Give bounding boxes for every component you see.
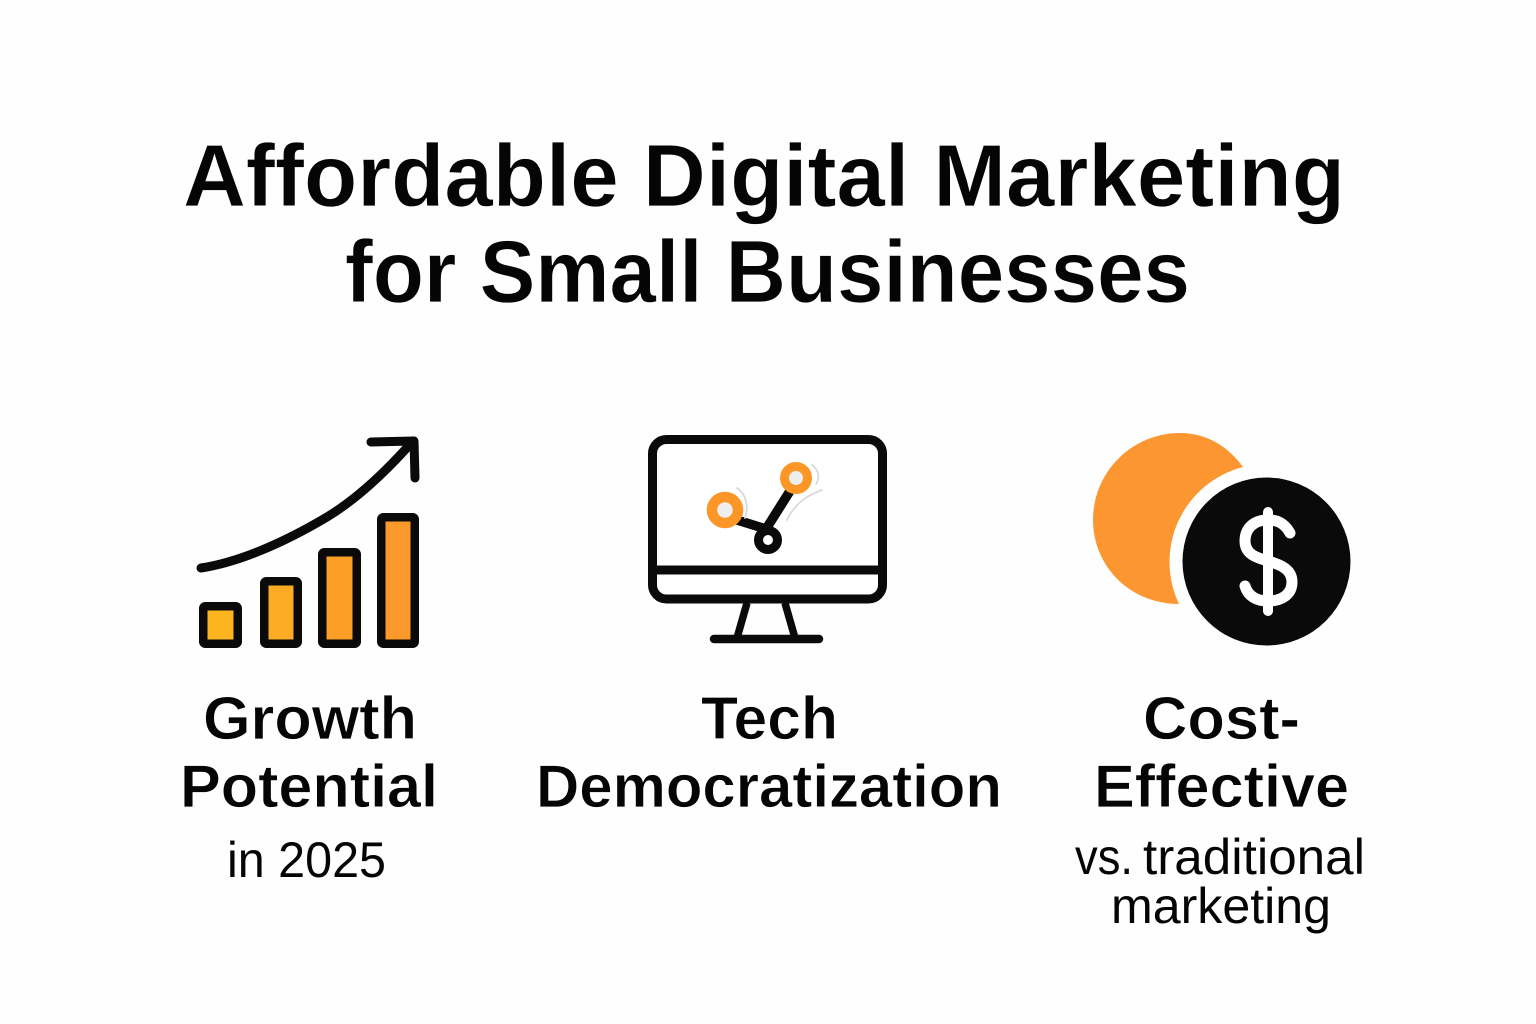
- subtext: vs. traditional marketing: [1075, 829, 1365, 934]
- subtext: vs. traditional marketing: marketing: [1111, 878, 1331, 934]
- heading: cost-effective: Cost-: [1143, 685, 1300, 752]
- heading: growth potential: [180, 685, 438, 820]
- heading: growth potential: Growth: [203, 685, 417, 752]
- heading: tech democratization: Democratization: [536, 753, 1002, 820]
- icon: orange crescent and dollar coin: [1093, 433, 1350, 646]
- heading: tech democratization: Tech: [701, 685, 838, 752]
- subtext: vs. traditional marketing: vs.: [1075, 829, 1133, 885]
- icon: monitor with connected nodes: [650, 440, 885, 639]
- heading: tech democratization: [536, 685, 1002, 820]
- subtext: in 2025: in 2025: [227, 832, 386, 888]
- panel: cost-effective: [1075, 433, 1365, 934]
- heading: cost-effective: [1094, 685, 1349, 820]
- subtext: vs. traditional marketing: traditional: [1143, 829, 1365, 885]
- heading: cost-effective: Effective: [1094, 753, 1349, 820]
- icon: bar chart with rising arrow: [201, 441, 415, 644]
- panel: growth potential: [180, 441, 438, 888]
- heading: growth potential: Potential: [180, 753, 438, 820]
- panel: tech democratization: [536, 440, 1002, 820]
- title: Affordable Digital Marketing: [183, 126, 1345, 225]
- title: [183, 126, 1345, 321]
- title: for Small Businesses: [345, 222, 1190, 321]
